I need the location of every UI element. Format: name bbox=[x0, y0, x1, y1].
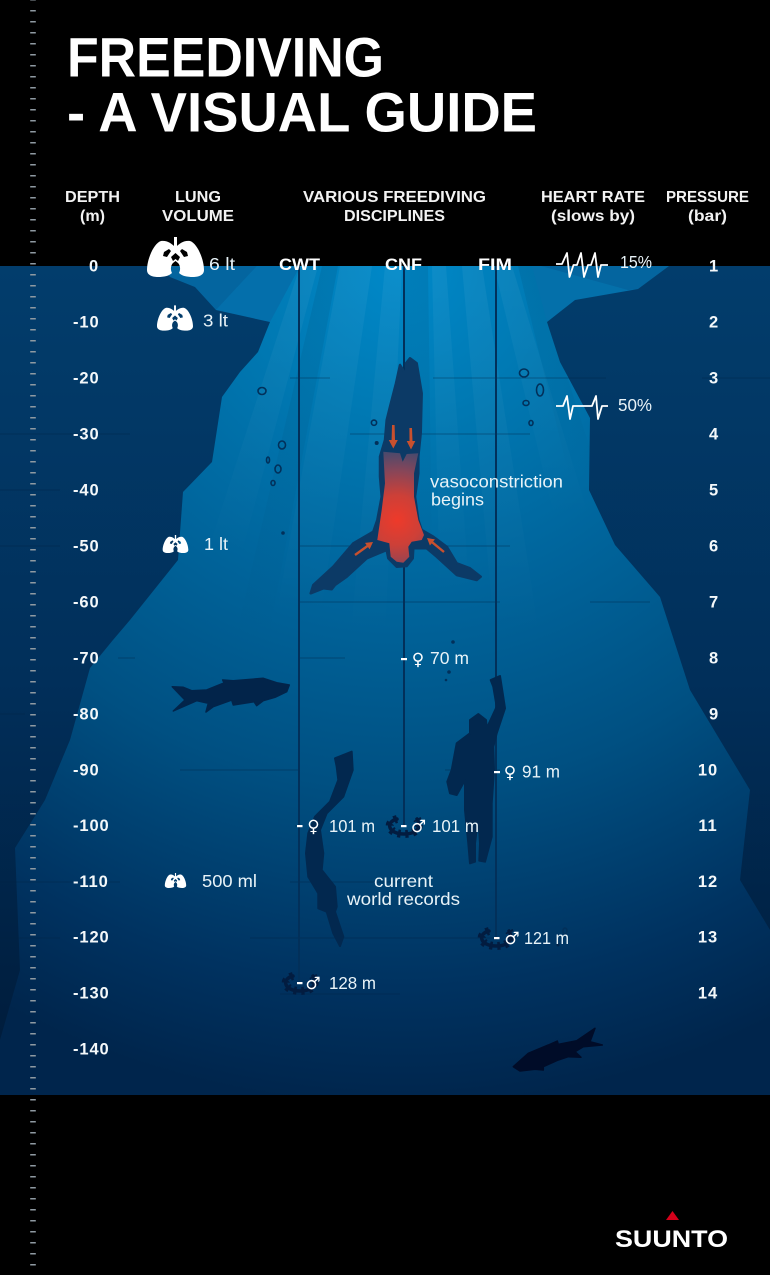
pressure scale bbox=[698, 257, 719, 1002]
discipline labels bbox=[279, 256, 512, 274]
record: men CWT 128 m bbox=[297, 973, 376, 994]
lung volume: 3 lt: 3 lt bbox=[203, 310, 228, 330]
panel: underwater scene bbox=[0, 266, 770, 1095]
rope: CNF bbox=[403, 266, 405, 825]
facets near surface bbox=[160, 266, 669, 322]
fish: upper bbox=[172, 678, 289, 712]
logo: Suunto: SUUNTO bbox=[615, 1226, 728, 1253]
title: - A VISUAL GUIDE bbox=[67, 81, 537, 144]
diver: monofin CWT bbox=[306, 752, 353, 946]
heading: heart rate: (slows by) bbox=[551, 208, 635, 225]
diver: FIM pulling on rope bbox=[447, 676, 505, 863]
heart rate: 50% bbox=[556, 395, 652, 419]
heading: pressure bbox=[666, 189, 749, 225]
diver silhouette bbox=[311, 358, 481, 593]
heading: lung volume: LUNG bbox=[175, 189, 221, 206]
rock wall: left bbox=[0, 266, 270, 1040]
depth scale: -20 bbox=[73, 369, 100, 387]
record: men CNF 101 m: ♂ bbox=[411, 817, 426, 837]
rock wall: right bbox=[547, 266, 770, 930]
bubbles near diver bbox=[371, 420, 379, 445]
record: women FIM 91 m: 91 m bbox=[522, 762, 560, 782]
depth scale: -50 bbox=[73, 537, 100, 555]
depth scale: -110 bbox=[73, 873, 109, 891]
heading: depth: DEPTH bbox=[65, 189, 120, 206]
record: women CNF 70 m bbox=[401, 648, 469, 670]
record: women CNF 70 m: 70 m bbox=[430, 648, 469, 668]
pressure scale: 9 bbox=[709, 705, 719, 723]
lung volume: 1 lt: 1 lt bbox=[204, 534, 228, 554]
caption: current world records: world records bbox=[346, 889, 460, 909]
heading: lung volume bbox=[162, 189, 234, 225]
lung volume: 1 lt bbox=[163, 534, 228, 554]
heading: disciplines bbox=[303, 189, 486, 225]
record: men FIM 121 m: 121 m bbox=[524, 928, 569, 948]
pressure scale: 2 bbox=[709, 313, 719, 331]
ruler ticks bbox=[30, 0, 36, 1275]
depth scale: -30 bbox=[73, 425, 100, 443]
blood concentrated in torso bbox=[377, 452, 424, 563]
lung volume: 6 lt: 6 lt bbox=[209, 254, 235, 274]
caption: current world records: current bbox=[374, 871, 433, 891]
heart rate: 15%: 15% bbox=[620, 252, 652, 272]
lung volume: 500 ml: 500 ml bbox=[202, 871, 257, 891]
depth scale: 0 bbox=[89, 257, 99, 275]
title bbox=[67, 26, 537, 144]
caption: current world records bbox=[346, 871, 460, 909]
depth scale: -40 bbox=[73, 481, 100, 499]
pressure scale: 11 bbox=[698, 817, 718, 835]
heading: disciplines: VARIOUS FREEDIVING bbox=[303, 189, 486, 206]
discipline labels: FIM bbox=[478, 256, 512, 274]
heading: lung volume: VOLUME bbox=[162, 208, 234, 225]
depth scale: -130 bbox=[73, 984, 110, 1002]
heart rate: 15% bbox=[556, 252, 652, 277]
title: FREEDIVING bbox=[67, 26, 384, 89]
record: women CWT 101 m bbox=[297, 816, 375, 837]
heading: pressure: (bar) bbox=[688, 208, 727, 225]
depth scale: -80 bbox=[73, 705, 100, 723]
depth scale bbox=[73, 257, 110, 1058]
depth lines bbox=[0, 378, 770, 994]
depth scale: -120 bbox=[73, 928, 110, 946]
pressure scale: 5 bbox=[709, 481, 719, 499]
pressure scale: 10 bbox=[698, 761, 718, 779]
arrows: blood flow to core bbox=[354, 425, 445, 556]
record: men FIM 121 m bbox=[494, 928, 569, 949]
logo: Suunto bbox=[615, 1211, 728, 1253]
heart rate: 50%: 50% bbox=[618, 395, 652, 415]
depth scale: -140 bbox=[73, 1040, 110, 1058]
pressure scale: 8 bbox=[709, 649, 719, 667]
record: men CNF 101 m bbox=[401, 816, 479, 837]
heading: heart rate: HEART RATE bbox=[541, 189, 645, 206]
anchor: CNF bbox=[390, 819, 419, 834]
light rays bbox=[205, 266, 600, 640]
callout: vasoconstriction: begins bbox=[431, 490, 484, 510]
pressure scale: 6 bbox=[709, 537, 719, 555]
heading: pressure: PRESSURE bbox=[666, 189, 749, 206]
lung volume: 6 lt bbox=[147, 237, 235, 277]
bubbles bbox=[258, 369, 567, 946]
depth scale: -70 bbox=[73, 649, 100, 667]
fish: lower bbox=[513, 1028, 602, 1071]
rope: FIM bbox=[495, 266, 497, 940]
heading: heart rate bbox=[541, 189, 645, 225]
depth scale: -100 bbox=[73, 817, 110, 835]
heading: disciplines: DISCIPLINES bbox=[344, 208, 445, 225]
callout: vasoconstriction bbox=[430, 472, 563, 510]
discipline labels: CNF bbox=[385, 256, 422, 274]
pressure scale: 4 bbox=[709, 425, 719, 443]
record: women CWT 101 m: 101 m bbox=[329, 816, 375, 836]
callout: vasoconstriction: vasoconstriction bbox=[430, 472, 563, 492]
depth scale: -10 bbox=[73, 313, 100, 331]
record: men CWT 128 m: ♂ bbox=[305, 974, 321, 994]
record: men CNF 101 m: 101 m bbox=[432, 816, 479, 836]
pressure scale: 12 bbox=[698, 873, 718, 891]
depth scale: -90 bbox=[73, 761, 100, 779]
heading: depth bbox=[65, 189, 120, 225]
pressure scale: 1 bbox=[709, 257, 719, 275]
record: women FIM 91 m: ♀ bbox=[504, 763, 516, 783]
depth scale: -60 bbox=[73, 593, 100, 611]
discipline labels: CWT bbox=[279, 256, 320, 274]
lung volume: 3 lt bbox=[157, 305, 228, 331]
water column bbox=[0, 266, 770, 1095]
record: women CNF 70 m: ♀ bbox=[412, 650, 424, 670]
heading: depth: (m) bbox=[80, 208, 105, 225]
anchor: FIM bbox=[482, 931, 511, 946]
record: men FIM 121 m: ♂ bbox=[504, 929, 520, 949]
rope: CWT bbox=[298, 266, 300, 982]
pressure scale: 3 bbox=[709, 369, 719, 387]
record: men CWT 128 m: 128 m bbox=[329, 973, 376, 993]
pressure scale: 14 bbox=[698, 984, 718, 1002]
record: women CWT 101 m: ♀ bbox=[307, 817, 320, 837]
anchor: CWT bbox=[286, 976, 315, 991]
pressure scale: 7 bbox=[709, 593, 719, 611]
lung volume: 500 ml bbox=[165, 871, 257, 891]
pressure scale: 13 bbox=[698, 928, 718, 946]
diver: CNF with vasoconstriction bbox=[311, 358, 481, 593]
record: women FIM 91 m bbox=[494, 762, 560, 783]
